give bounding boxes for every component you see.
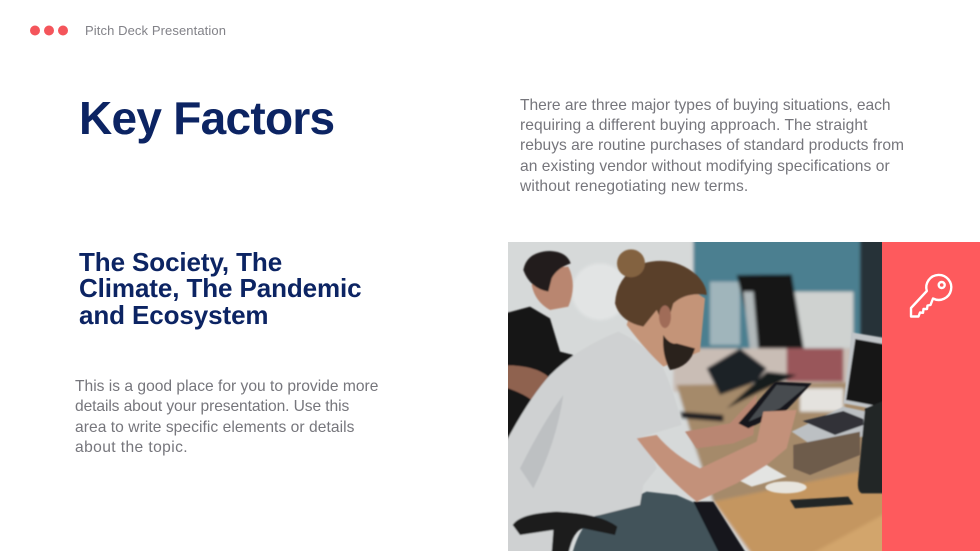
hair bun xyxy=(617,249,645,277)
subheading: Climate, The Pandemic xyxy=(79,273,362,303)
intro paragraph: There are three major types of buying situations, each xyxy=(520,96,891,114)
intro paragraph xyxy=(520,96,904,195)
icon: key xyxy=(910,274,952,318)
details paragraph: area to write specific elements or details xyxy=(75,419,354,436)
chair xyxy=(513,512,617,551)
intro paragraph: rebuys are routine purchases of standard products from xyxy=(520,137,904,154)
details paragraph: details about your presentation. Use this xyxy=(75,398,349,415)
man's shirt xyxy=(487,332,682,551)
subheading: and Ecosystem xyxy=(79,300,268,330)
hair xyxy=(615,261,707,328)
header dots xyxy=(30,26,68,36)
subheading xyxy=(79,247,362,330)
back arm xyxy=(685,395,757,448)
background man xyxy=(487,307,573,475)
beard xyxy=(663,335,695,370)
front arm xyxy=(637,410,797,502)
accent panel xyxy=(882,242,980,551)
laptop xyxy=(843,332,907,415)
header label: Pitch Deck Presentation xyxy=(85,23,226,38)
photo: man using tablet at desk xyxy=(508,242,882,551)
title: Key Factors xyxy=(79,92,334,144)
details paragraph: This is a good place for you to provide more xyxy=(75,378,378,395)
ear xyxy=(659,305,671,328)
details paragraph: about the topic. xyxy=(75,439,188,456)
keyboard, mouse, phone xyxy=(738,465,787,487)
details paragraph xyxy=(75,378,378,456)
intro paragraph: without renegotiating new terms. xyxy=(520,178,748,195)
intro paragraph: an existing vendor without modifying specifications or xyxy=(520,158,890,175)
subheading: The Society, The xyxy=(79,247,282,277)
trousers xyxy=(568,492,727,551)
water bottle xyxy=(858,392,907,493)
intro paragraph: requiring a different buying approach. The straight xyxy=(520,117,868,134)
neck and face xyxy=(627,278,705,367)
tablet xyxy=(738,382,812,428)
